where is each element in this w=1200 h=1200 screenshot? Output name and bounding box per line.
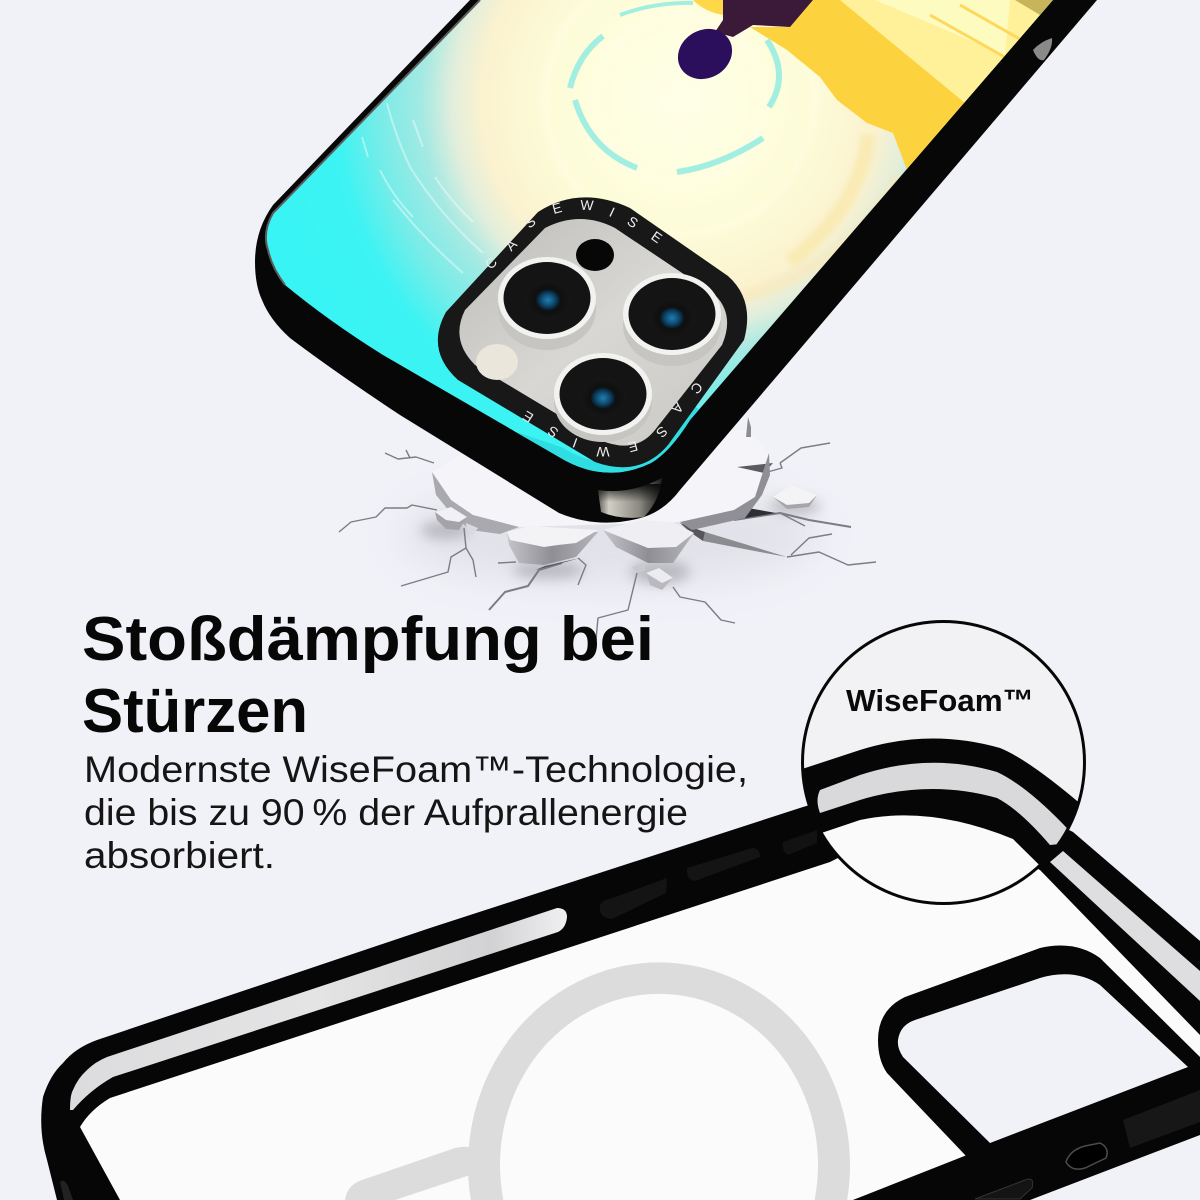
clear back panel <box>80 838 1200 1200</box>
callout ring <box>802 622 1084 904</box>
bottom port <box>1066 1143 1107 1169</box>
brand ring lettering: S <box>624 213 641 231</box>
bottom band <box>853 1063 1200 1200</box>
brand ring lettering: E <box>648 228 665 246</box>
yellow dress <box>750 0 1053 170</box>
right foam slot <box>1050 851 1200 1001</box>
magsafe ring <box>468 962 850 1200</box>
purple figure <box>678 0 813 80</box>
brand ring lettering: W <box>596 444 610 460</box>
brand ring lettering: E <box>520 408 536 426</box>
center right rock <box>603 530 694 563</box>
brand ring lettering: C <box>482 254 500 272</box>
printed artwork <box>266 0 1053 473</box>
magsafe alignment pill <box>345 1147 481 1200</box>
magnifier callout: WiseFoam <box>801 620 1086 905</box>
callout label: WiseFoam™ <box>846 683 1034 718</box>
brand ring lettering: W <box>580 197 595 213</box>
cracked ground impact <box>339 417 876 640</box>
camera cutout opening <box>898 974 1188 1143</box>
bottom button <box>975 1179 1033 1199</box>
heading <box>82 605 654 746</box>
heading: Stoßdämpfung bei <box>82 605 654 674</box>
center left rock <box>507 532 598 565</box>
crack lines <box>339 443 876 640</box>
brand ring lettering: E <box>550 199 564 217</box>
dress highlights <box>840 0 1053 103</box>
brand ring lettering: C <box>687 379 706 397</box>
brand ring lettering: A <box>502 236 520 254</box>
brand ring lettering: E <box>626 438 640 456</box>
body text: absorbiert. <box>84 835 275 876</box>
corner port <box>60 1181 73 1200</box>
frame corner reflection <box>595 478 666 518</box>
screen edge bezel <box>266 0 480 285</box>
body text <box>84 749 748 876</box>
side button glint <box>1033 38 1052 60</box>
brand ring lettering: S <box>545 423 561 441</box>
phone with printed case <box>250 0 1100 523</box>
side buttons <box>600 830 817 919</box>
outer black frame <box>41 782 1200 1200</box>
brand ring lettering: I <box>607 204 617 220</box>
small rocks <box>435 507 467 530</box>
mic hole <box>576 239 614 271</box>
brand ring lettering: S <box>521 213 539 231</box>
camera cutout frame <box>878 946 1200 1157</box>
lens 3 <box>554 353 652 442</box>
brand ring lettering: A <box>668 399 687 417</box>
clear case with black frame <box>41 782 1200 1200</box>
sun rings <box>741 133 902 302</box>
body text: die bis zu 90 % der Aufprallenergie <box>84 792 688 833</box>
brand ring lettering: I <box>570 435 580 451</box>
band highlight <box>1123 1090 1200 1148</box>
slab side walls <box>432 472 519 534</box>
magnified frame corner <box>804 738 1078 864</box>
brand ring lettering <box>482 197 706 460</box>
swirl streaks <box>362 103 483 273</box>
case frame <box>255 0 1097 523</box>
body text: Modernste WiseFoam™-Technologie, <box>84 749 748 790</box>
dark wedges <box>734 508 776 520</box>
left foam slot <box>70 908 567 1110</box>
flash <box>476 344 518 380</box>
lens 1 <box>498 257 596 350</box>
lens 2 <box>623 273 721 366</box>
brand ring lettering: S <box>653 423 671 441</box>
silver camera plate <box>459 219 727 446</box>
camera island <box>438 197 747 467</box>
heading: Stürzen <box>82 677 308 746</box>
cyan arcs <box>570 3 779 172</box>
